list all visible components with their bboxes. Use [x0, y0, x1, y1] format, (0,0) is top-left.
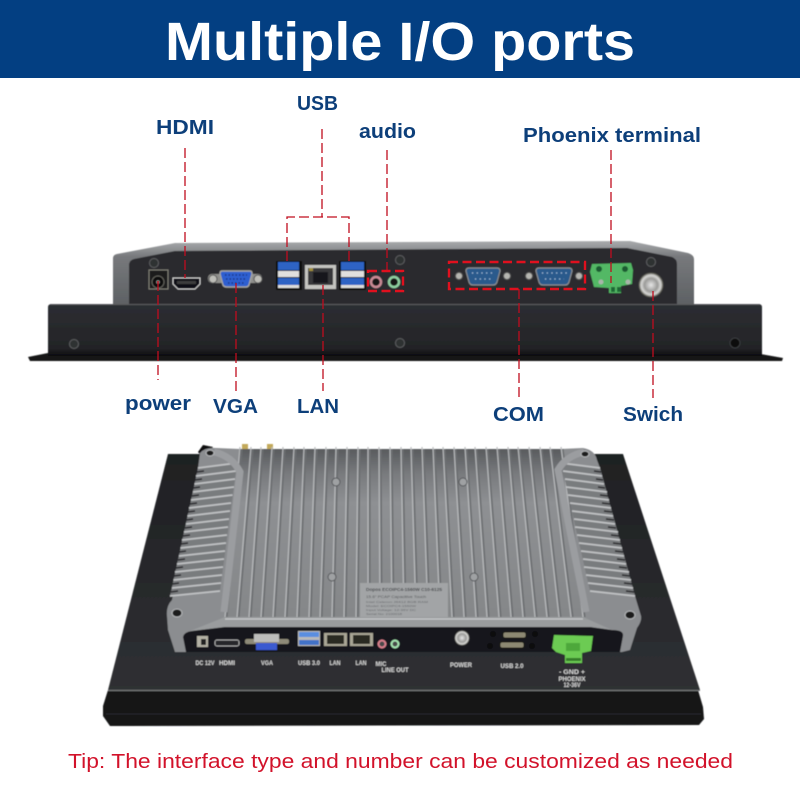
- grey rear housing: [113, 241, 694, 304]
- rear HDMI: [215, 640, 239, 646]
- right ear fins: [558, 452, 635, 612]
- antennas: [198, 444, 273, 460]
- rear Phoenix terminal: [552, 635, 593, 663]
- specification plate: Input Voltage: 12-36V DC: [366, 608, 417, 612]
- rear port captions: USB 2.0: [500, 664, 524, 670]
- label: HDMI: HDMI: [156, 117, 214, 139]
- screws: [70, 256, 656, 348]
- specification plate: Dopos ECOIPC4-1560W C10-6125: [366, 587, 443, 592]
- customization tip: Tip: The interface type and number can be customized as needed: [68, 751, 733, 773]
- specification plate: Intel Celeron J6412 8GB RAM: [366, 600, 429, 604]
- photo: side view of panel PC with ports: [28, 241, 783, 361]
- rear port captions: DC 12V: [196, 661, 214, 667]
- rear port captions: PHOENIX: [558, 677, 586, 683]
- COM port 2: [526, 268, 582, 285]
- left ear fins: [170, 452, 240, 612]
- specification plate: 15.6" PCAP Capacitive Touch: [366, 594, 426, 599]
- rear port captions: - GND +: [559, 670, 586, 676]
- specification plate: Serial No: 2100018: [366, 612, 402, 616]
- label: LAN: LAN: [297, 396, 339, 418]
- COM port 1: [456, 268, 510, 285]
- USB ports left: [276, 261, 302, 290]
- Phoenix terminal: [590, 263, 633, 293]
- rear port captions: LAN: [356, 661, 366, 667]
- rear port captions: [196, 661, 586, 689]
- LAN port: [305, 265, 336, 289]
- heatsink screws: [328, 478, 478, 581]
- rear port captions: LINE OUT: [382, 668, 409, 674]
- label: USB: USB: [297, 93, 338, 115]
- rear port captions: MIC: [376, 662, 387, 668]
- rear port captions: 12-36V: [564, 683, 580, 689]
- specification plate: Model: ECOIPC4-1560W: [366, 604, 416, 608]
- dark port face: [129, 248, 677, 304]
- audio highlight box: [368, 271, 403, 291]
- rear port captions: USB 3.0: [298, 661, 321, 667]
- rear port captions: HDMI: [219, 661, 235, 667]
- audio jacks: [371, 277, 399, 287]
- rear port captions: POWER: [450, 663, 473, 669]
- power jack: [149, 270, 168, 289]
- specification plate: [360, 583, 448, 617]
- heatsink ridges: [227, 449, 585, 617]
- VGA port: [208, 271, 262, 287]
- label: audio: audio: [359, 121, 416, 143]
- USB ports right: [339, 261, 366, 290]
- label: Phoenix terminal: Phoenix terminal: [523, 125, 701, 147]
- front bezel flange: [28, 353, 783, 361]
- rear USB 2.0: [487, 631, 538, 649]
- mounting holes: [172, 450, 635, 619]
- light lower chamfer: [190, 617, 612, 631]
- label: VGA: VGA: [213, 396, 258, 418]
- HDMI port: [173, 278, 200, 289]
- DC jack: [197, 636, 208, 647]
- left ear frame: [214, 452, 240, 612]
- rear VGA: [245, 634, 289, 650]
- front metal case: [48, 304, 762, 356]
- rear power button: [454, 630, 470, 646]
- photo: rear view of panel PC: [103, 444, 704, 726]
- right ear frame: [558, 452, 586, 612]
- leader lines: [158, 129, 653, 398]
- main finned surface: [225, 449, 583, 617]
- power switch: [639, 273, 663, 297]
- COM highlight box: [449, 262, 585, 289]
- label: Swich: Swich: [623, 404, 683, 426]
- bottom front lip: [103, 690, 704, 726]
- title banner: [0, 0, 800, 78]
- rear LAN ports: [324, 633, 373, 646]
- rear audio jacks: [378, 640, 398, 648]
- rear port captions: LAN: [330, 661, 340, 667]
- rear USB 3.0: [298, 631, 320, 646]
- title: Multiple I/O ports: [165, 12, 635, 72]
- label: COM: COM: [493, 404, 544, 426]
- rear port captions: VGA: [261, 661, 274, 667]
- black rear panel: [108, 454, 700, 690]
- label: power: power: [125, 393, 191, 415]
- heatsink body: [167, 448, 641, 652]
- rear I/O band: [183, 627, 623, 652]
